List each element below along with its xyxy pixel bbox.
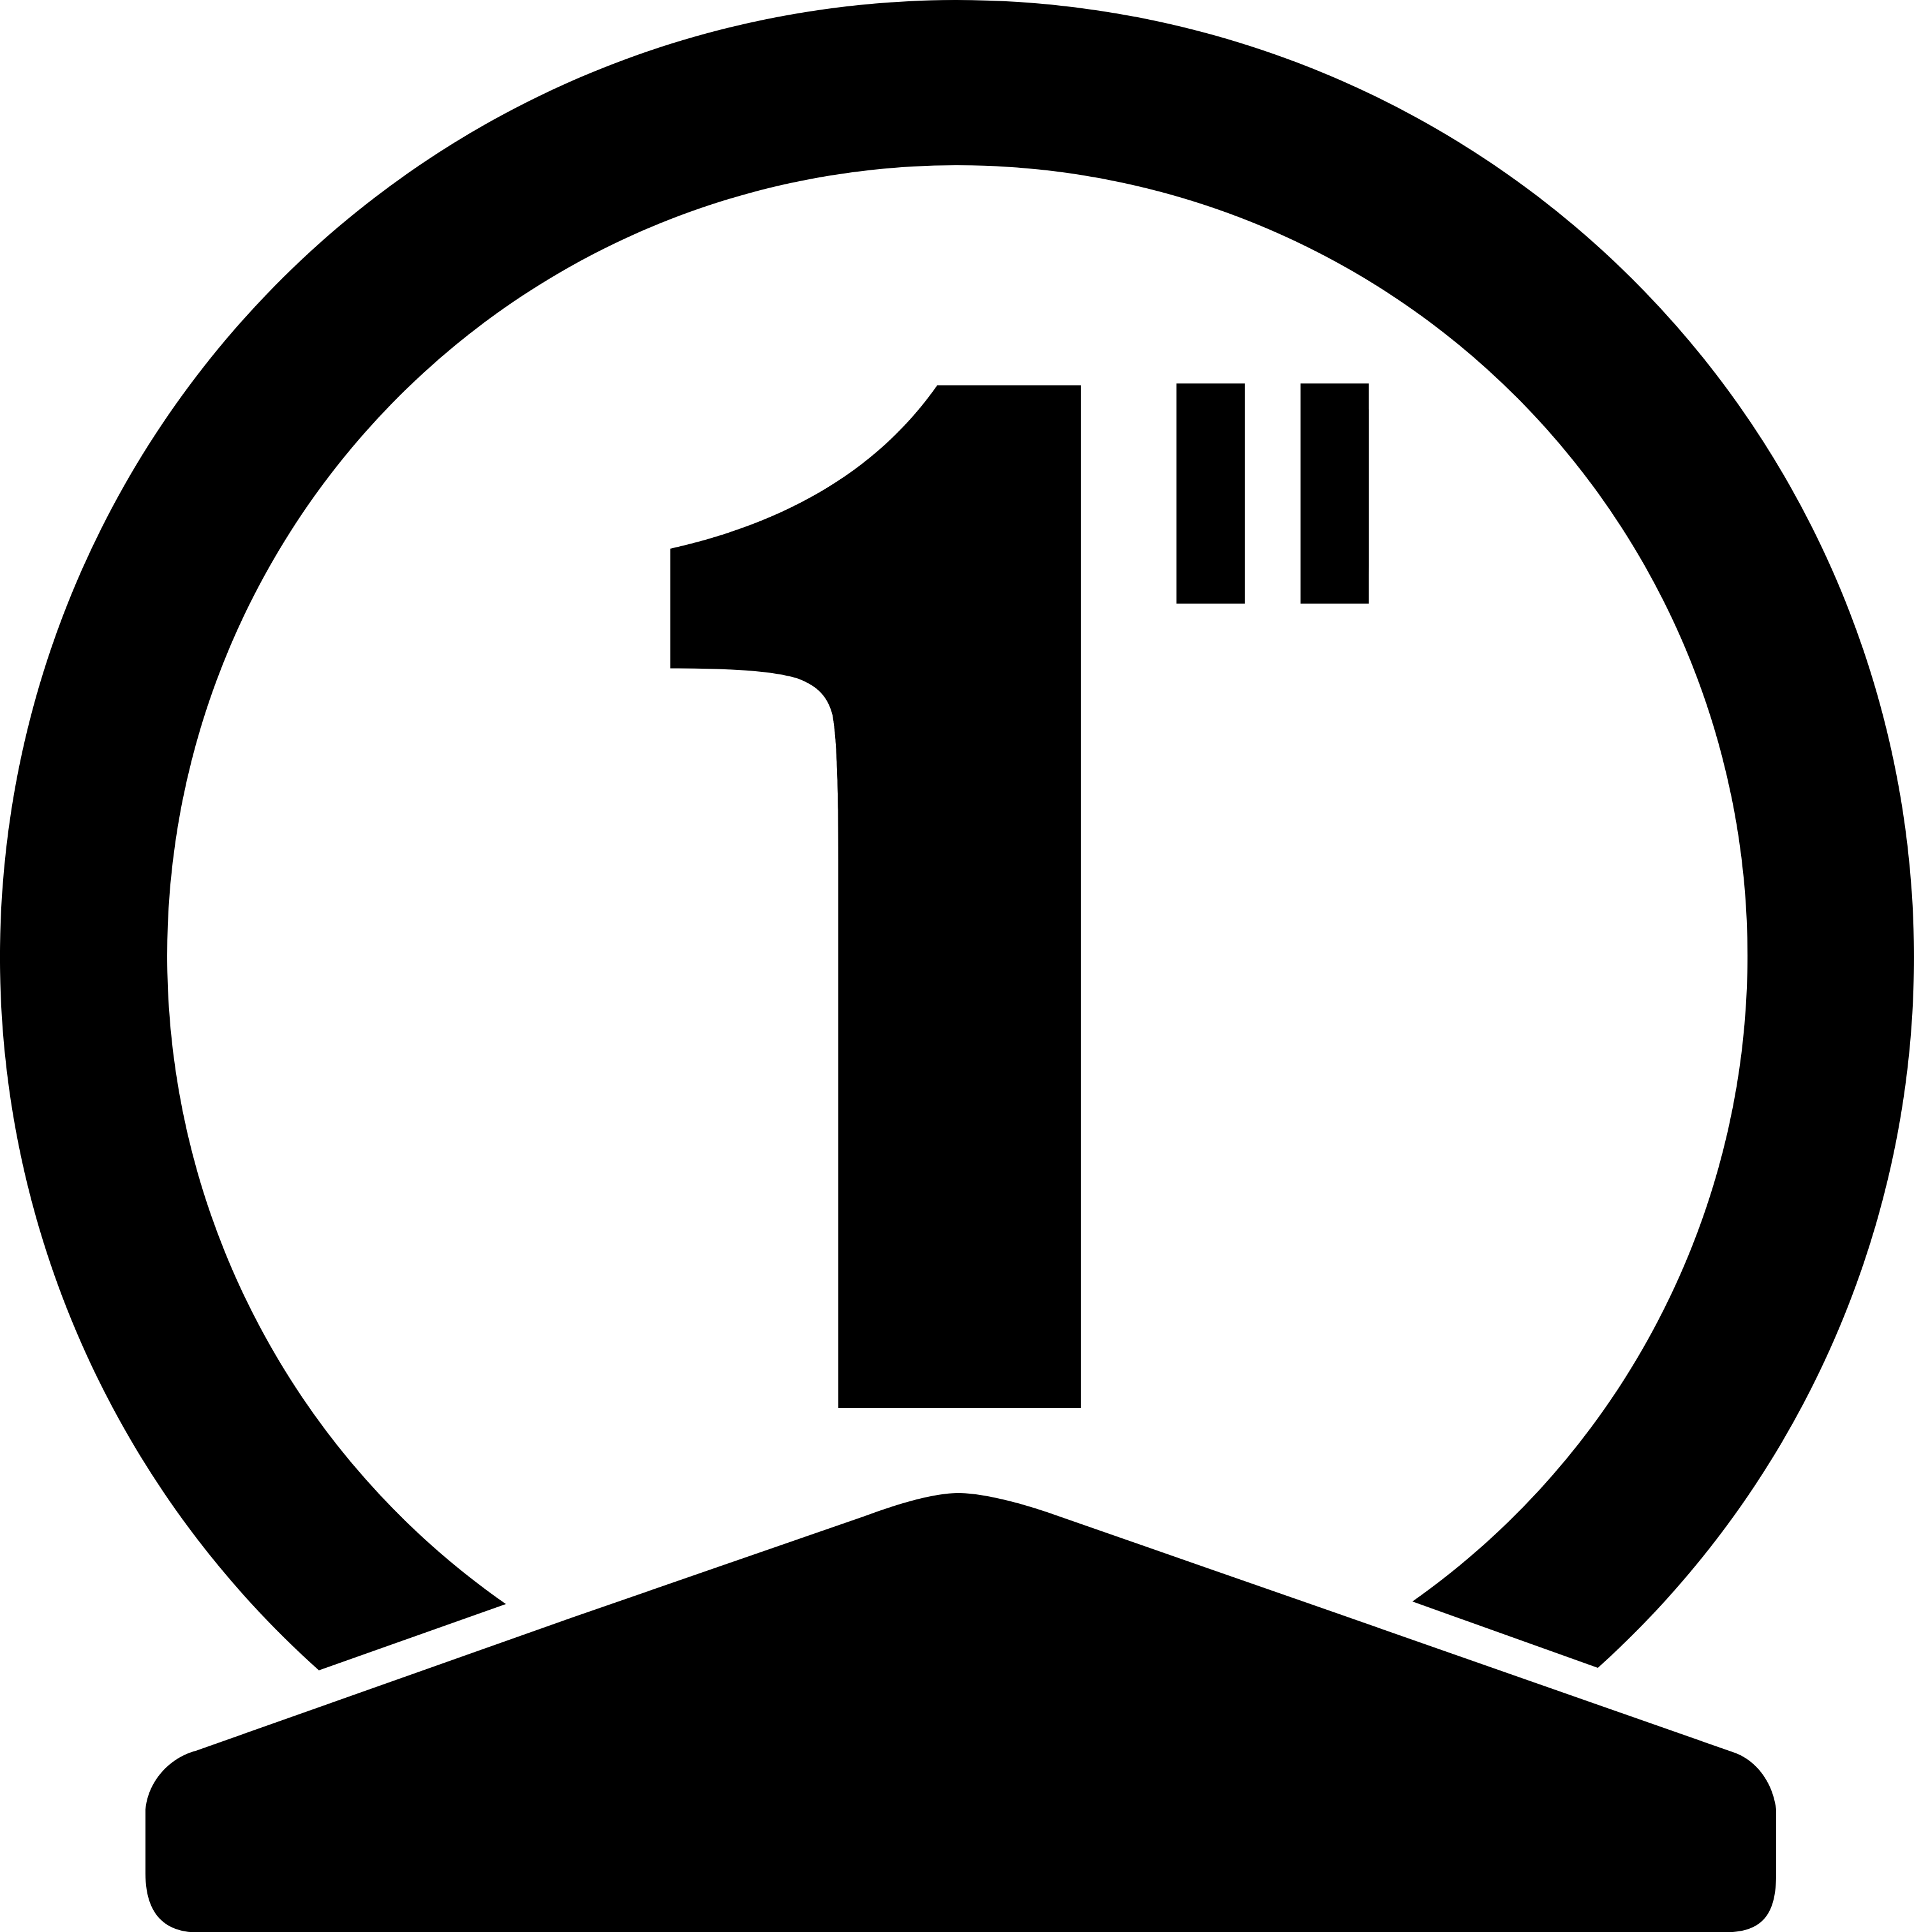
inch mark: " xyxy=(1132,202,1414,1271)
numeral 1: 1 xyxy=(485,63,1312,1723)
icon: base pedestal xyxy=(145,1493,1776,1932)
